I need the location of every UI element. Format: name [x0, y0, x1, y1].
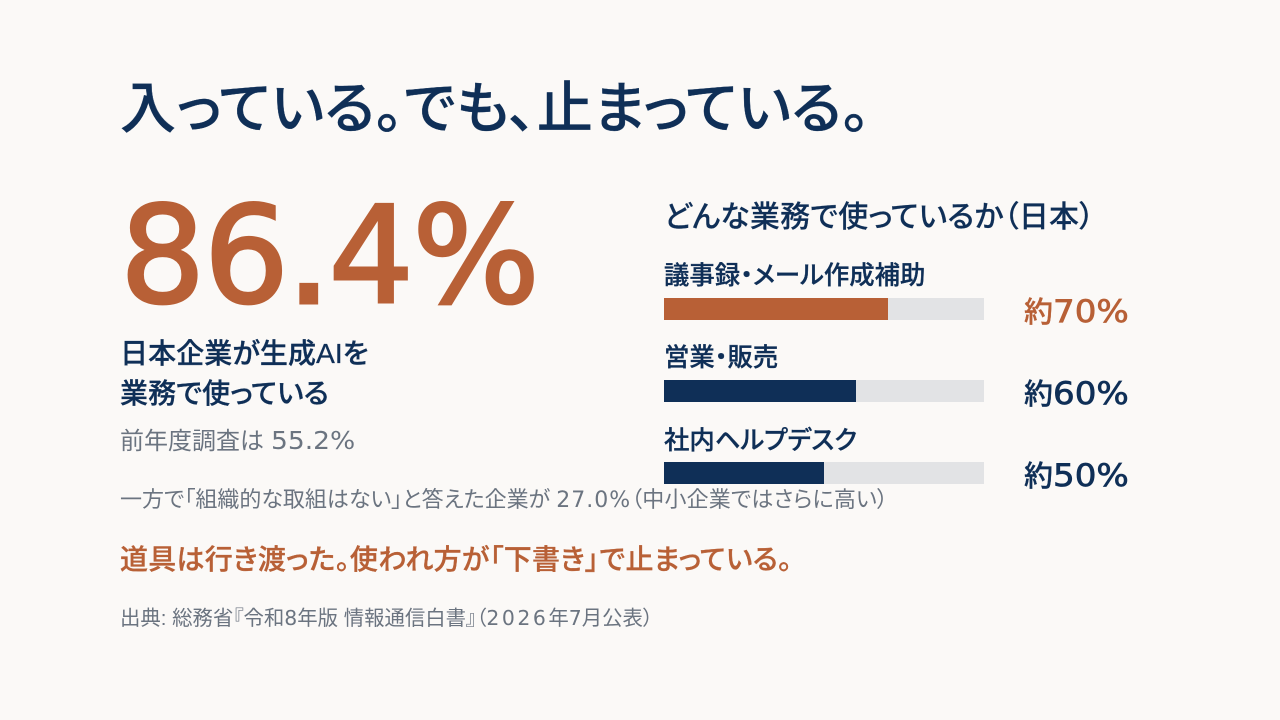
value: 50%: 約 — [1024, 461, 1053, 493]
chart heading: どんな業務で使っているか（日本） — [664, 201, 1094, 234]
bar: 50% — [664, 462, 984, 484]
bar: 60% — [664, 380, 984, 402]
title: 入っている。でも、止まっている。 — [120, 77, 871, 140]
big stat: 86.4%: 86.4% — [120, 178, 538, 334]
label: sales: 営業・販売 — [664, 344, 778, 372]
stat description — [120, 338, 369, 409]
stat description: 業務で使っている — [120, 378, 329, 409]
previous year comparison: 前年度調査は — [120, 428, 264, 455]
value: 70%: 約 — [1024, 297, 1053, 329]
source: 出典: 総務省『令和8年版 情報通信白書』（2026年7月公表） — [120, 606, 653, 630]
bar: 70% — [664, 298, 984, 320]
value: 50%: 50% — [1053, 458, 1129, 494]
label: helpdesk: 社内ヘルプデスク — [664, 427, 857, 455]
previous year comparison — [120, 426, 355, 455]
value: 60%: 約 — [1024, 379, 1053, 411]
stat description: 日本企業が生成AIを — [120, 338, 369, 369]
value: 60%: 60% — [1053, 376, 1129, 412]
previous year comparison: 55.2% — [271, 426, 355, 455]
key message: 道具は行き渡った。使われ方が「下書き」で止まっている。 — [120, 544, 792, 575]
label: minutes and email: 議事録・メール作成補助 — [664, 262, 925, 290]
organization note: 一方で「組織的な取組はない」と答えた企業が 27.0%（中小企業ではさらに高い） — [120, 487, 888, 513]
bar chart — [664, 262, 1129, 494]
value: 70%: 70% — [1053, 294, 1129, 330]
